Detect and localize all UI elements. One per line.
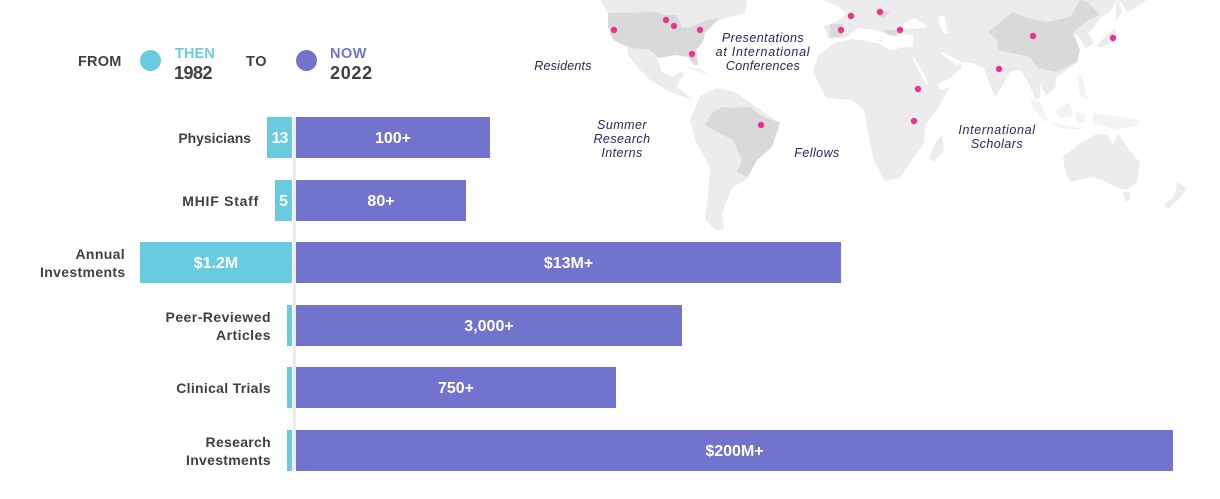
map label: presentations <box>716 31 810 73</box>
legend: from: FROM <box>78 54 122 70</box>
tasmania <box>1123 192 1130 202</box>
madagascar <box>929 135 944 162</box>
then bar <box>287 367 292 408</box>
now bar: 750+ <box>438 380 474 397</box>
center axis <box>293 117 296 471</box>
row: clinical trials <box>176 367 616 408</box>
then bar <box>275 180 292 221</box>
mediterranean <box>845 30 913 50</box>
now bar <box>296 305 682 346</box>
now bar <box>296 430 1173 471</box>
china <box>988 0 1100 72</box>
legend: 2022: 2022 <box>330 63 373 83</box>
usa <box>608 12 720 65</box>
caspian <box>938 15 948 34</box>
then bar <box>287 305 292 346</box>
sulawesi <box>1075 112 1085 123</box>
map label: summer research interns: Summer <box>597 118 647 132</box>
label: Clinical Trials <box>176 380 271 396</box>
now bar: 100+ <box>375 130 411 147</box>
africa <box>813 37 950 181</box>
philippines <box>1077 75 1088 100</box>
map label: presentations: at International <box>716 45 810 59</box>
south america <box>690 88 780 231</box>
new zealand <box>1164 182 1187 209</box>
red sea <box>912 57 929 85</box>
australia <box>1063 133 1140 190</box>
label: Annual <box>75 246 125 262</box>
black sea <box>903 18 928 29</box>
map label: summer research interns: Research <box>593 132 651 146</box>
label: Peer-Reviewed <box>166 309 271 325</box>
then bar <box>287 430 292 471</box>
new guinea <box>1093 113 1140 130</box>
location dots <box>611 9 1116 128</box>
now bar <box>296 180 466 221</box>
row: physicians <box>178 117 490 158</box>
sumatra <box>1030 100 1048 122</box>
row: mhif staff <box>182 180 466 221</box>
label: Investments <box>40 264 126 280</box>
map label: summer research interns <box>593 118 651 160</box>
map label: international scholars: International <box>958 123 1036 137</box>
label: Physicians <box>178 130 251 146</box>
persian gulf <box>940 52 962 65</box>
then bar: 5 <box>279 193 288 210</box>
label <box>40 246 126 280</box>
now bar <box>296 367 616 408</box>
map label: international scholars <box>958 123 1036 151</box>
legend: now label: NOW <box>330 46 367 62</box>
legend: 1982: 1982 <box>174 63 212 83</box>
mexico and central america <box>627 48 693 100</box>
label <box>166 309 271 343</box>
label: Research <box>206 434 271 450</box>
then bar: $1.2M <box>194 255 238 272</box>
now bar <box>296 117 490 158</box>
legend: to: TO <box>246 54 267 70</box>
map label: international scholars: Scholars <box>971 137 1023 151</box>
now bar <box>296 242 841 283</box>
borneo <box>1055 102 1073 118</box>
seas <box>845 15 962 85</box>
map label: presentations: Presentations <box>722 31 804 45</box>
row: annual investments <box>40 242 841 283</box>
eurasia <box>822 0 1147 100</box>
now bar: $13M+ <box>544 255 593 272</box>
then bar: 13 <box>272 130 287 147</box>
japan <box>1096 28 1117 47</box>
cuba <box>685 67 710 75</box>
label <box>186 434 271 468</box>
then bar <box>267 117 292 158</box>
now bar: $200M+ <box>705 443 764 460</box>
map label: summer research interns: Interns <box>601 146 643 160</box>
legend: now dot <box>296 50 317 71</box>
now bar: 3,000+ <box>464 318 514 335</box>
label: MHIF Staff <box>182 193 259 209</box>
label: Investments <box>186 452 271 468</box>
map label: presentations: Conferences <box>726 59 800 73</box>
legend: then dot <box>140 50 161 71</box>
map label: residents: Residents <box>534 59 592 73</box>
then bar <box>140 242 292 283</box>
legend: then label: THEN <box>175 46 215 62</box>
java <box>1050 122 1087 130</box>
small dark countries <box>830 24 843 38</box>
row: research investments <box>186 430 1173 471</box>
now bar: 80+ <box>367 193 395 210</box>
map label: fellows: Fellows <box>794 146 840 160</box>
row: peer-reviewed articles <box>166 305 682 346</box>
label: Articles <box>216 327 271 343</box>
canada <box>600 0 747 28</box>
brazil <box>705 107 780 177</box>
